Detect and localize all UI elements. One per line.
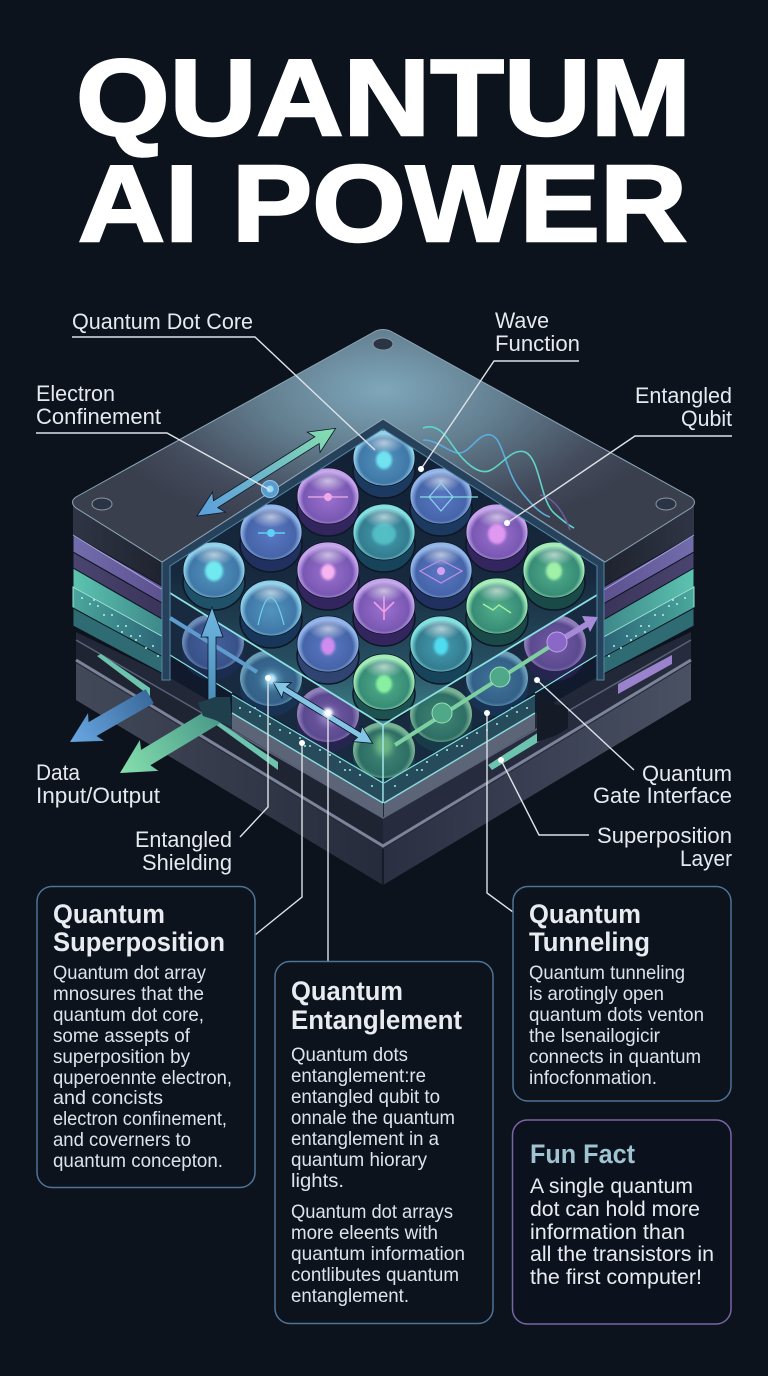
body: quantum entanglement [291,1044,465,1307]
body: fun fact: the first computer! [530,1265,702,1289]
label: Data Input/Output: Data [36,760,81,785]
body: quantum tunneling: the lsenailogicir [529,1025,660,1047]
body: quantum superposition: quantum concepton. [53,1150,223,1172]
body: quantum superposition: and concists [53,1087,163,1109]
qubit chain arrow [395,616,598,745]
chamber interior [169,428,597,803]
sphere row 1 [353,430,415,498]
right layer stack [598,506,694,677]
body: quantum superposition: superposition by [53,1046,190,1068]
body: quantum entanglement: entangled qubit to [291,1086,440,1108]
body: fun fact: A single quantum [530,1174,693,1198]
body: quantum superposition: quantum dot core, [53,1004,204,1026]
connector: superposition card [255,740,305,935]
body: quantum tunneling [529,962,704,1089]
glass edges [170,593,597,803]
dim lower qubit spheres [182,614,586,786]
body: quantum entanglement: quantum information [291,1243,465,1265]
label: Entangled Qubit [504,383,732,526]
label: Quantum Gate Interface [534,677,732,808]
body: fun fact [530,1174,714,1289]
panel: quantum entanglement [275,962,493,1324]
panel: fun fact [512,1120,731,1324]
heading: quantum entanglement: Entanglement [291,1005,462,1035]
body: quantum entanglement: entanglement in a [291,1128,439,1150]
label: Wave Function: Wave [495,308,549,333]
label: Quantum Dot Core: Quantum Dot Core [72,309,253,334]
glass top floor [170,428,597,725]
label: Electron Confinement [36,381,270,490]
heading: quantum tunneling: Tunneling [529,927,650,957]
quantum chip diagram [62,330,695,885]
label: Electron Confinement: Confinement [36,404,161,429]
heading: quantum tunneling: Quantum [529,899,641,929]
title: AI POWER [78,143,687,265]
label: Superposition Layer [498,757,732,871]
heading: quantum tunneling [529,899,650,957]
panel: quantum tunneling [513,886,731,1101]
body: fun fact: dot can hold more [530,1197,700,1221]
label: Entangled Shielding [135,675,271,875]
label: Wave Function: Function [495,331,580,356]
label: Superposition Layer: Superposition [597,823,732,848]
body: quantum tunneling: connects in quantum [529,1046,701,1068]
heading: quantum superposition: Superposition [53,927,225,957]
body: quantum entanglement: more eleents with [291,1222,438,1244]
vertical data arrow [201,607,223,703]
label: Quantum Dot Core [72,309,375,450]
left layer stack [73,506,169,677]
body: quantum superposition: electron confinement, [53,1108,227,1130]
heading: quantum superposition: Quantum [53,899,165,929]
body: quantum superposition: Quantum dot array [53,962,206,984]
body: quantum tunneling: infocfonmation. [529,1067,657,1089]
sphere row 5 [240,578,528,648]
body: quantum tunneling: quantum dots venton [529,1004,704,1026]
panel: quantum superposition [37,886,255,1188]
sphere row 7 [353,654,415,720]
body: quantum entanglement: lights. [291,1170,344,1192]
connector: entanglement card [325,710,331,962]
sphere row 3 [240,504,528,572]
label: Wave Function [418,308,580,472]
label: Data Input/Output: Input/Output [36,783,160,808]
body: quantum entanglement: entanglement. [291,1285,409,1307]
label: Quantum Gate Interface: Gate Interface [593,783,732,808]
body: quantum tunneling: is arotingly open [529,983,664,1005]
arrow junction housing [198,697,232,727]
body: quantum entanglement: onnale the quantum [291,1107,455,1129]
body: quantum superposition: some assepts of [53,1025,191,1047]
connector: tunneling card [484,710,513,912]
wave function curves [423,427,574,530]
blue entanglement wall line [170,618,257,672]
top cover plate [72,330,694,562]
body: quantum entanglement: entanglement:re [291,1065,426,1087]
screw holes [92,338,676,510]
data slot strips [97,654,672,770]
label: Entangled Shielding: Entangled [135,827,232,852]
heading: quantum entanglement: Quantum [291,976,403,1006]
interface notch [537,693,568,742]
sphere row 2 [297,468,478,536]
heading: fun fact: Fun Fact [530,1139,635,1169]
body: quantum entanglement: quantum hiorary [291,1149,427,1171]
body: quantum superposition [53,962,232,1172]
body: fun fact: all the transistors in [530,1242,714,1266]
label: Entangled Shielding: Shielding [142,850,232,875]
data output blue arrow [62,682,158,756]
label: Entangled Qubit: Qubit [681,406,732,431]
body: quantum superposition: quperoennte electron, [53,1067,232,1089]
body: quantum entanglement: contlibutes quantum [291,1264,459,1286]
sphere row 4 [183,542,585,610]
sparkle superposition band [232,695,535,818]
body: quantum entanglement: Quantum dots [291,1044,408,1066]
qubit sphere array [183,430,585,720]
window lip [162,419,604,680]
heading: quantum entanglement [291,976,462,1035]
label: Entangled Qubit: Entangled [635,383,732,408]
base housing [76,632,691,885]
entanglement bidirectional arrow [266,674,377,751]
electron confinement double arrow [191,418,342,526]
heading: quantum superposition [53,899,225,957]
lower glass wall [170,593,597,783]
body: quantum superposition: mnosures that the [53,983,204,1005]
body: fun fact: information than [530,1220,685,1244]
sphere row 6 [297,616,472,684]
label: Quantum Gate Interface: Quantum [642,761,732,786]
data input green arrow [111,700,224,788]
title [76,37,691,265]
title: QUANTUM [76,37,691,159]
body: quantum tunneling: Quantum tunneling [529,962,685,984]
body: quantum entanglement: Quantum dot arrays [291,1201,453,1223]
label: Superposition Layer: Layer [680,846,732,871]
label: Data Input/Output [36,760,160,808]
label: Electron Confinement: Electron [36,381,115,406]
body: quantum superposition: and coverners to [53,1129,191,1151]
